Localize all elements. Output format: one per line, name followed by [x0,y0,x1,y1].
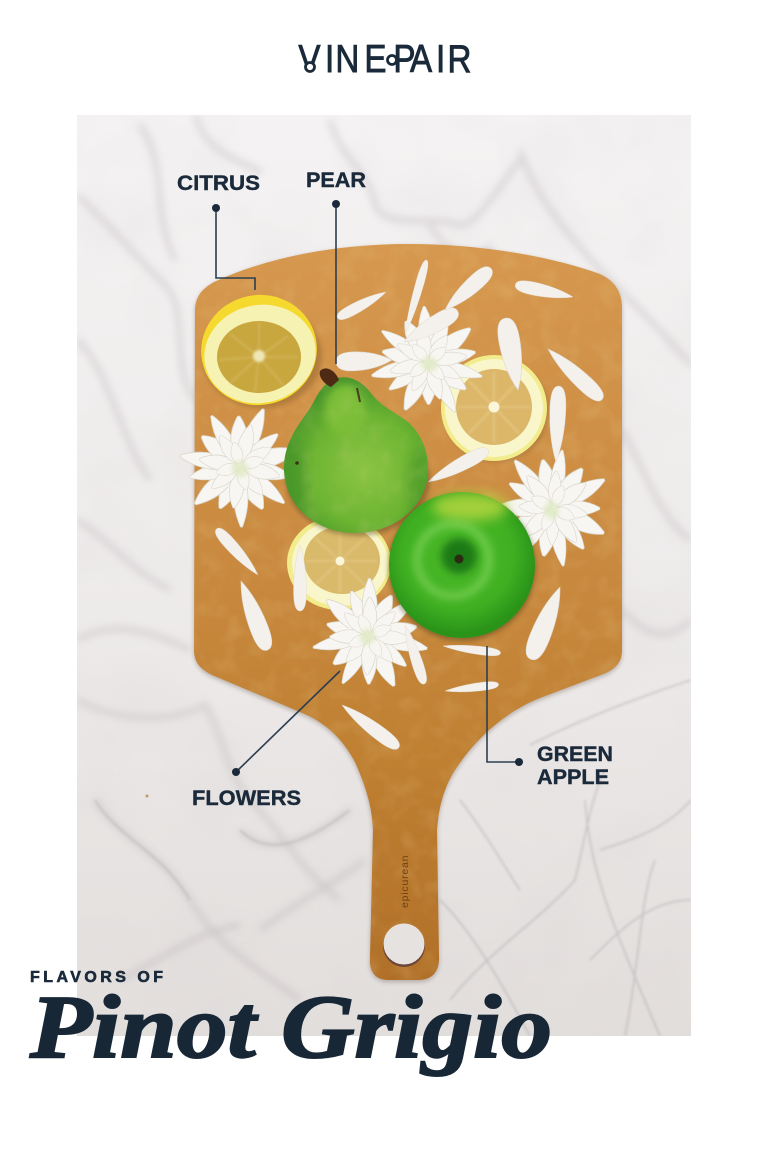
callout: pear: PEAR [306,169,366,192]
logo: VinePair: VINEPAIR [298,36,471,81]
callout: green apple [487,646,613,789]
callout: flowers [192,671,340,810]
flower: upper centre [336,295,496,428]
lemon slice: citrus top left [191,284,327,416]
lemon slice: citrus lower [287,516,391,610]
flower: right [487,441,620,576]
marble background photo [77,115,691,1036]
callout: green apple: GREEN [537,743,613,766]
board hole [383,924,425,967]
pear [278,368,432,536]
flower: left [158,383,323,549]
loose petals [212,259,608,753]
green apple [388,492,536,641]
callout: pear [306,169,366,364]
callout: flowers: FLOWERS [192,787,301,810]
title: Pinot Grigio [29,978,552,1077]
callout: citrus [177,172,260,290]
flower: lower [294,561,447,712]
callout: green apple: APPLE [537,766,609,789]
board brand text: epicurean [399,855,411,908]
cutting board [190,240,630,985]
lemon slice: citrus right [441,355,549,462]
title eyebrow: FLAVORS OF [30,969,163,986]
callout: citrus: CITRUS [177,172,260,195]
